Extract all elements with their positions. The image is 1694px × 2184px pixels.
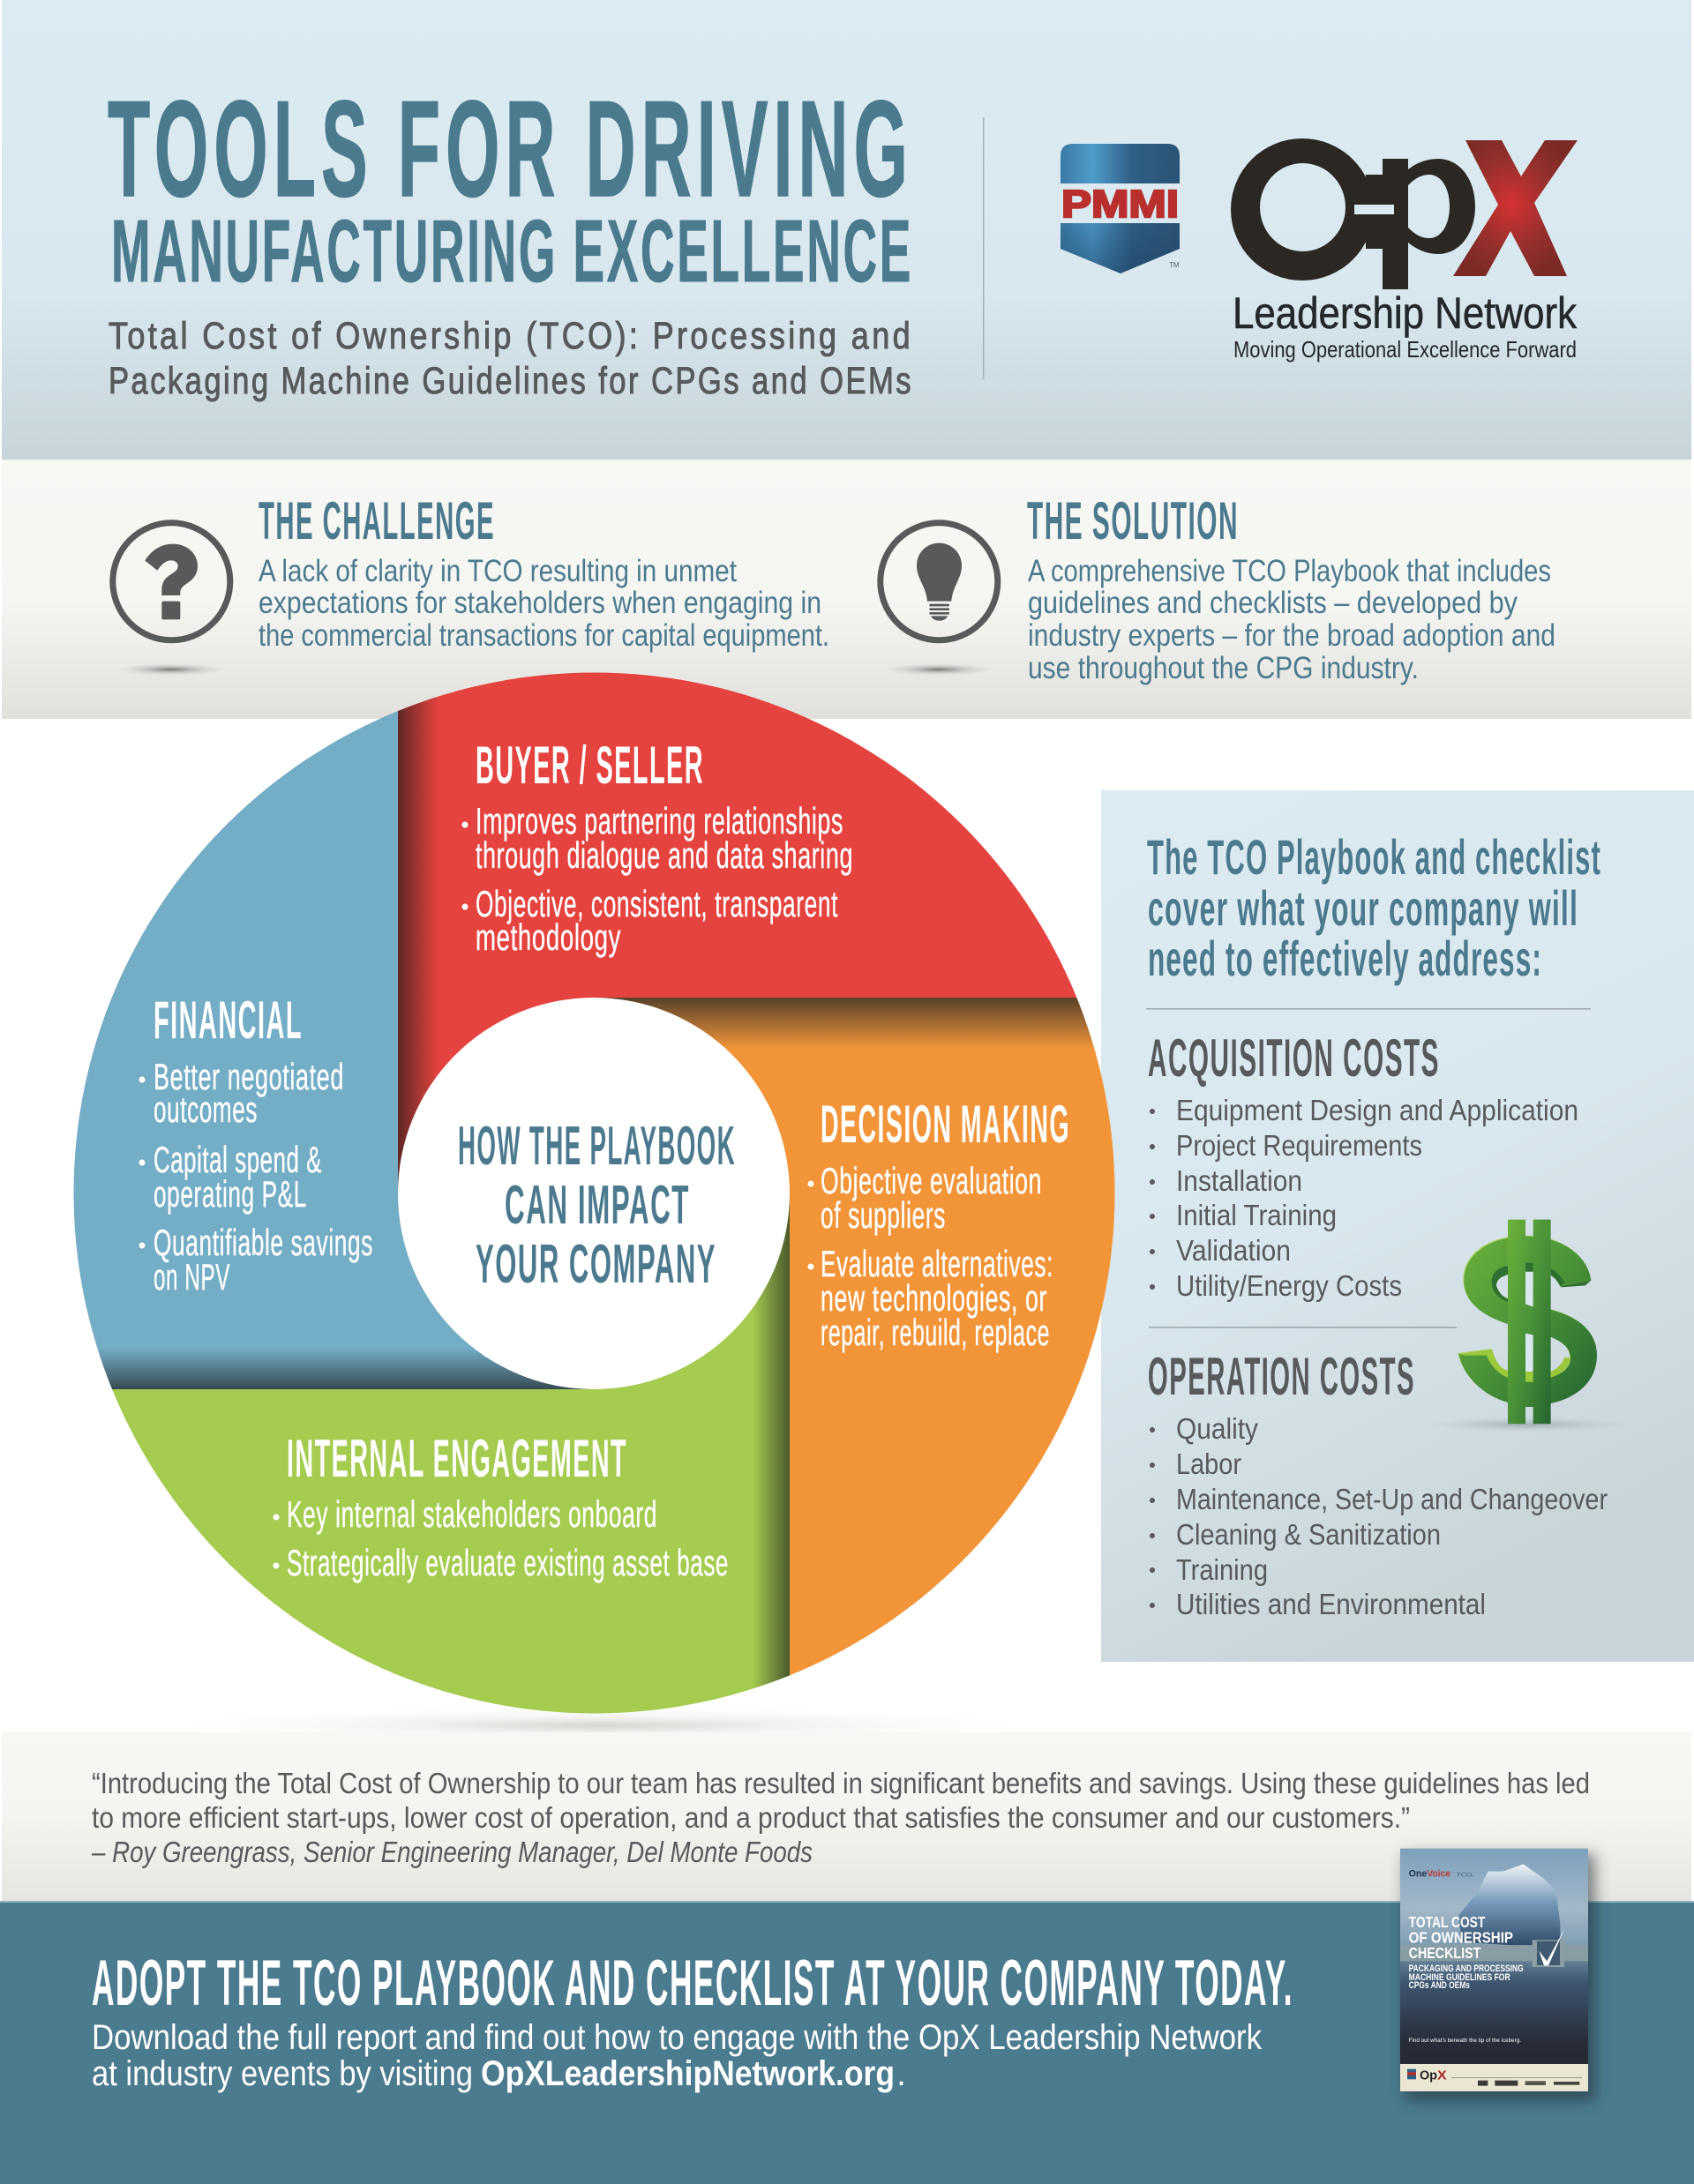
operation costs: Maintenance, Set-Up and Changeover: [1176, 1483, 1608, 1515]
center label: [458, 1116, 736, 1295]
report cover thumbnail: Find out what’s beneath the tip of the iceberg.: [1409, 2038, 1521, 2044]
logo: PMMI shield: TM: [1169, 261, 1180, 269]
circle diagram: DECISION MAKING: [821, 1095, 1070, 1154]
text: buyer / seller: through dialogue and data sharing: [476, 834, 853, 876]
circle floor shadow: [176, 1708, 1023, 1743]
challenge text: A lack of clarity in TCO resulting in unmet: [259, 554, 737, 588]
text: internal engagement: INTERNAL ENGAGEMENT: [287, 1429, 627, 1488]
report cover thumbnail: X: [1437, 2068, 1447, 2083]
text: financial: outcomes: [154, 1088, 258, 1130]
logo: PMMI shield: PMMI: [1061, 183, 1179, 226]
call to action text: [92, 1948, 1293, 2093]
solution text: [1027, 491, 1555, 685]
testimonial quote: – Roy Greengrass, Senior Engineering Manager, Del Monte Foods: [91, 1836, 813, 1868]
title: MANUFACTURING EXCELLENCE: [111, 202, 913, 301]
text: decision making: repair, rebuild, replace: [821, 1312, 1050, 1353]
call to action text: Download the full report and find out how to engage with the OpX Leadership Network: [92, 2018, 1263, 2057]
operation costs: OPERATION COSTS: [1148, 1347, 1415, 1406]
report cover thumbnail: [1400, 1849, 1595, 2101]
header band: [2, 0, 1691, 460]
report cover thumbnail: PACKAGING AND PROCESSING: [1409, 1963, 1524, 1974]
subtitle: Packaging Machine Guidelines for CPGs and OEMs: [109, 360, 913, 402]
testimonial quote: to more efficient start-ups, lower cost of operation, and a product that satisfies the consumer and our customers.”: [92, 1801, 1410, 1834]
call to action text: at industry events by visiting: [92, 2054, 473, 2093]
acquisition costs: Installation: [1176, 1164, 1302, 1197]
text: buyer / seller: Objective, consistent, transparent: [476, 883, 838, 924]
text: financial: on NPV: [154, 1256, 230, 1298]
challenge text: [259, 491, 829, 653]
acquisition costs: Equipment Design and Application: [1176, 1094, 1578, 1126]
subtitle: [109, 315, 913, 402]
text: internal engagement: Key internal stakeholders onboard: [287, 1493, 657, 1535]
center circle: [398, 998, 790, 1389]
challenge and solution band: [2, 460, 1691, 719]
report cover thumbnail: CPGs AND OEMs: [1409, 1980, 1470, 1991]
panel heading: [1147, 829, 1601, 986]
report cover thumbnail: TOTAL COST: [1409, 1913, 1485, 1931]
circle diagram: HOW THE PLAYBOOK: [458, 1116, 736, 1177]
logo: OpX Leadership Network: Leadership Network: [1233, 288, 1578, 338]
segment: decision making (orange): [594, 998, 1115, 1714]
center label: CAN IMPACT: [505, 1175, 690, 1236]
operation costs: Training: [1176, 1553, 1268, 1586]
text: buyer / seller: Improves partnering relationships: [476, 800, 843, 841]
challenge text: the commercial transactions for capital equipment.: [259, 618, 829, 653]
logo: OpX Leadership Network: [1231, 138, 1578, 363]
solution text: A comprehensive TCO Playbook that includes: [1028, 554, 1551, 588]
acquisition costs: Utility/Energy Costs: [1176, 1269, 1402, 1302]
text: financial: Better negotiated: [154, 1056, 344, 1097]
acquisition costs: Initial Training: [1176, 1199, 1337, 1231]
text: decision making: new technologies, or: [821, 1277, 1047, 1319]
acquisition costs: [1148, 1028, 1578, 1302]
text: financial: operating P&L: [154, 1173, 307, 1215]
text: financial: [139, 991, 373, 1298]
icon: light bulb: [881, 523, 998, 676]
segment: financial (blue): [73, 672, 594, 1389]
report cover thumbnail: TCO.: [1457, 1872, 1474, 1878]
circle diagram: [73, 672, 1115, 1714]
text: decision making: Evaluate alternatives:: [821, 1243, 1053, 1284]
title: TOOLS FOR DRIVING: [108, 72, 913, 225]
text: financial: Capital spend &: [154, 1139, 322, 1180]
segment: internal engagement (green): [73, 1193, 790, 1714]
icon: question mark: [113, 523, 230, 676]
report cover thumbnail: CHECKLIST: [1409, 1944, 1480, 1962]
call to action text: OpXLeadershipNetwork.org: [481, 2054, 895, 2093]
call to action text: .: [896, 2054, 906, 2093]
report cover thumbnail: MACHINE GUIDELINES FOR: [1409, 1972, 1510, 1983]
acquisition costs: Project Requirements: [1176, 1129, 1422, 1162]
text: decision making: Objective evaluation: [821, 1160, 1042, 1201]
center label: YOUR COMPANY: [476, 1234, 716, 1295]
text: financial: FINANCIAL: [154, 991, 303, 1050]
report cover thumbnail: OF OWNERSHIP: [1409, 1929, 1513, 1947]
operation costs: Utilities and Environmental: [1176, 1588, 1486, 1620]
text: buyer / seller: BUYER / SELLER: [476, 736, 704, 795]
solution text: THE SOLUTION: [1027, 491, 1239, 550]
report cover thumbnail: Op: [1420, 2068, 1437, 2083]
solution text: industry experts – for the broad adoption and: [1028, 618, 1555, 653]
solution text: guidelines and checklists – developed by: [1028, 586, 1518, 620]
icon: dollar sign: [1427, 1220, 1630, 1432]
text: buyer / seller: methodology: [476, 916, 621, 958]
report cover thumbnail: One: [1409, 1868, 1427, 1879]
quote band: [2, 1732, 1691, 1902]
call to action band: [0, 1901, 1694, 2184]
text: decision making: [808, 1095, 1070, 1353]
challenge text: expectations for stakeholders when engaging in: [259, 586, 821, 620]
operation costs: Quality: [1176, 1412, 1258, 1445]
text: buyer / seller: [462, 736, 853, 958]
segment: buyer / seller (red): [398, 672, 1115, 1193]
acquisition costs: Validation: [1176, 1234, 1291, 1267]
subtitle: Total Cost of Ownership (TCO): Processing and: [109, 315, 913, 357]
operation costs: Cleaning & Sanitization: [1176, 1518, 1441, 1551]
challenge text: THE CHALLENGE: [259, 491, 495, 550]
panel: what the playbook covers: [1101, 790, 1694, 1662]
text: internal engagement: [274, 1429, 729, 1583]
text: financial: Quantifiable savings: [154, 1222, 373, 1263]
text: internal engagement: Strategically evaluate existing asset base: [287, 1542, 729, 1583]
logo: OpX Leadership Network: Moving Operational Excellence Forward: [1233, 336, 1577, 363]
operation costs: Labor: [1176, 1447, 1241, 1480]
logo: PMMI shield: [1061, 144, 1180, 273]
text: decision making: of suppliers: [821, 1194, 946, 1236]
operation costs: [1148, 1347, 1608, 1620]
report cover thumbnail: Voice: [1427, 1868, 1450, 1879]
testimonial quote: [91, 1767, 1590, 1868]
title: [108, 72, 913, 301]
solution text: use throughout the CPG industry.: [1028, 651, 1419, 685]
